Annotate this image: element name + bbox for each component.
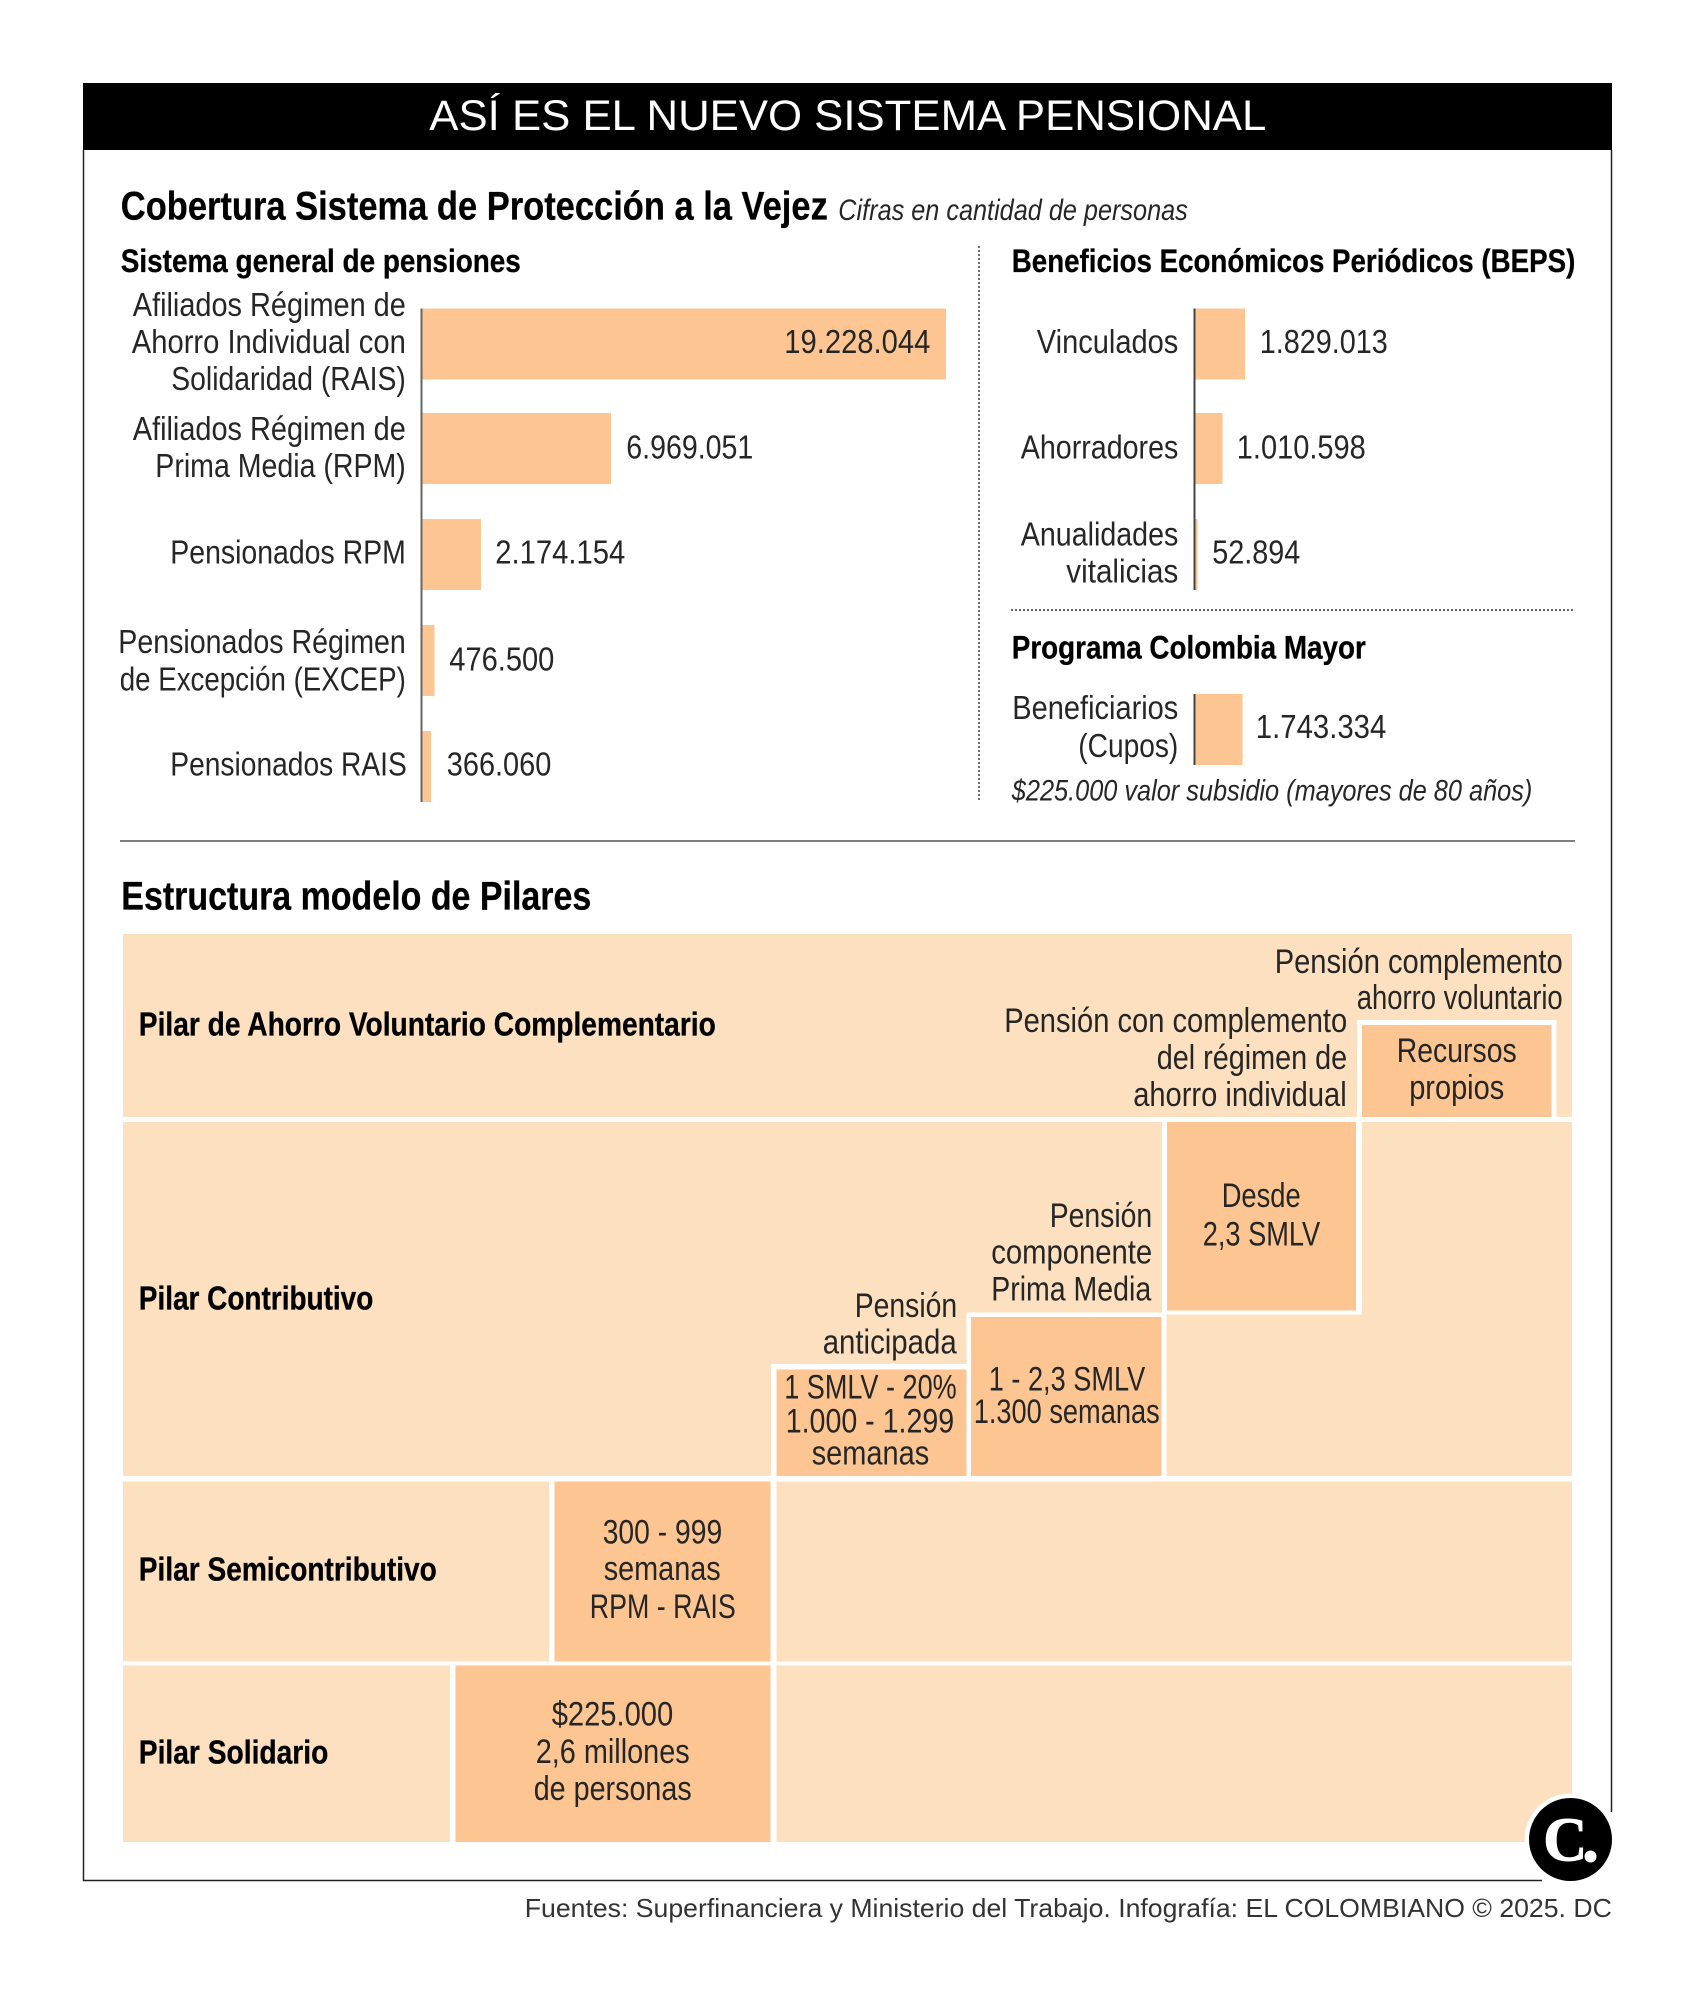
step: white outlines bbox=[450, 1020, 1556, 1842]
pilar: semicontributivo: Pilar Semicontributivo bbox=[139, 1550, 437, 1587]
pilar: contributivo: Prima Media bbox=[991, 1271, 1151, 1309]
pilar: ahorro voluntario: del régimen de bbox=[1157, 1039, 1347, 1077]
pilar: contributivo bbox=[139, 1122, 1356, 1476]
section divider bbox=[120, 840, 1575, 842]
note: valor subsidio: $225.000 valor subsidio (mayores de 80 años) bbox=[1011, 775, 1532, 808]
pilar: ahorro voluntario: ahorro individual bbox=[1133, 1076, 1347, 1114]
pilar: contributivo: 1.000 - 1.299 bbox=[786, 1403, 954, 1441]
vertical dotted divider bbox=[978, 246, 980, 802]
pilar: ahorro voluntario bbox=[139, 943, 1563, 1117]
pilar: solidario: $225.000 bbox=[552, 1696, 673, 1734]
bar chart: pensiones: Ahorro Individual con bbox=[132, 323, 406, 360]
bar chart: BEPS: Ahorradores bbox=[1021, 429, 1178, 466]
bar chart: pensiones: 6.969.051 bbox=[626, 429, 753, 466]
bar chart: pensiones: Afiliados Régimen de bbox=[133, 286, 406, 323]
panel: BEPS bbox=[1012, 243, 1575, 590]
pilar: semicontributivo: RPM - RAIS bbox=[590, 1588, 736, 1626]
pilar: contributivo: 1 - 2,3 SMLV bbox=[989, 1361, 1145, 1399]
bar chart: Colombia Mayor: (Cupos) bbox=[1078, 727, 1178, 764]
pilar: solidario: de personas bbox=[534, 1770, 692, 1808]
bar chart: pensiones: de Excepción (EXCEP) bbox=[120, 661, 406, 698]
bar chart: pensiones: 2.174.154 bbox=[495, 534, 625, 571]
horizontal dotted divider bbox=[1011, 609, 1575, 611]
pilar: semicontributivo: 300 - 999 bbox=[603, 1514, 722, 1552]
pilar: ahorro voluntario: ahorro voluntario bbox=[1357, 979, 1563, 1017]
pilar: contributivo: semanas bbox=[812, 1435, 929, 1473]
bar chart: BEPS: Anualidades bbox=[1021, 516, 1178, 553]
bar chart: pensiones: 366.060 bbox=[447, 746, 551, 783]
pilar: solidario bbox=[139, 1666, 771, 1842]
title banner: ASÍ ES EL NUEVO SISTEMA PENSIONAL bbox=[429, 92, 1266, 140]
pilar: ahorro voluntario: Pilar de Ahorro Voluntario Complementario bbox=[139, 1005, 716, 1042]
footer: sources: Fuentes: Superfinanciera y Ministerio del Trabajo. Infografía: EL COLOMBIANO © 2025. DC bbox=[525, 1893, 1612, 1923]
panel: sistema general de pensiones bbox=[118, 243, 946, 802]
bar chart: pensiones: Solidaridad (RAIS) bbox=[171, 360, 406, 397]
pilar: solidario: 2,6 millones bbox=[536, 1733, 690, 1771]
heading: cobertura: Cifras en cantidad de personas bbox=[838, 194, 1188, 227]
pilar: contributivo: Pensión bbox=[1050, 1197, 1152, 1235]
panel: pilares bbox=[123, 934, 1572, 1842]
heading: BEPS: Beneficios Económicos Periódicos (BEPS) bbox=[1012, 243, 1575, 279]
bar chart: BEPS: vitalicias bbox=[1066, 553, 1178, 590]
bar chart: pensiones: Pensionados RPM bbox=[170, 534, 406, 571]
pilar: contributivo: Pensión bbox=[855, 1287, 957, 1325]
bar chart: pensiones: 476.500 bbox=[449, 641, 554, 678]
bar chart: Colombia Mayor: Beneficiarios bbox=[1012, 689, 1178, 726]
heading: cobertura: Cobertura Sistema de Protección a la Vejez bbox=[121, 185, 828, 229]
pilar: ahorro voluntario: propios bbox=[1409, 1069, 1504, 1107]
icon: El Colombiano logo bbox=[1524, 1794, 1616, 1886]
pilar: contributivo: Desde bbox=[1222, 1177, 1301, 1215]
heading: sistema general: Sistema general de pensiones bbox=[121, 243, 521, 279]
bar chart: Colombia Mayor: 1.743.334 bbox=[1256, 708, 1386, 745]
icon: El Colombiano logo: C bbox=[1543, 1807, 1587, 1875]
bar chart: BEPS: Vinculados bbox=[1037, 323, 1178, 360]
bar chart: pensiones: 19.228.044 bbox=[784, 323, 930, 360]
pilar: ahorro voluntario: Pensión con complemento bbox=[1004, 1002, 1347, 1040]
bar chart: pensiones: Pensionados RAIS bbox=[170, 746, 407, 783]
pilar: solidario: Pilar Solidario bbox=[139, 1733, 328, 1770]
pilar: contributivo: Pilar Contributivo bbox=[139, 1279, 373, 1316]
pilar: contributivo: componente bbox=[991, 1234, 1152, 1272]
pilar: contributivo: 2,3 SMLV bbox=[1203, 1216, 1320, 1254]
bar chart: BEPS: 52.894 bbox=[1212, 534, 1300, 571]
title banner bbox=[83, 83, 1612, 150]
pilar: ahorro voluntario: Recursos bbox=[1397, 1032, 1517, 1070]
pilar: contributivo: 1 SMLV - 20% bbox=[784, 1369, 957, 1407]
pilar: ahorro voluntario: Pensión complemento bbox=[1275, 943, 1563, 981]
pilar: semicontributivo: semanas bbox=[604, 1550, 721, 1588]
pale background bbox=[123, 934, 1572, 1842]
pilar: semicontributivo bbox=[139, 1482, 771, 1662]
frame bbox=[84, 150, 1612, 1880]
bar chart: BEPS: 1.829.013 bbox=[1260, 323, 1388, 360]
bar chart: pensiones: Prima Media (RPM) bbox=[155, 447, 406, 484]
bar chart: BEPS bbox=[1021, 308, 1388, 590]
bar chart: Colombia Mayor bbox=[1012, 689, 1386, 765]
bar chart: BEPS: 1.010.598 bbox=[1237, 429, 1366, 466]
panel: programa Colombia Mayor bbox=[1011, 629, 1532, 808]
pilar: contributivo: anticipada bbox=[823, 1324, 957, 1362]
heading: Colombia Mayor: Programa Colombia Mayor bbox=[1012, 629, 1366, 665]
pilar: contributivo: 1.300 semanas bbox=[974, 1393, 1160, 1431]
bar chart: pensiones bbox=[118, 286, 946, 802]
bar chart: pensiones: Pensionados Régimen bbox=[118, 623, 406, 660]
bar chart: pensiones: Afiliados Régimen de bbox=[133, 410, 406, 447]
heading: estructura: Estructura modelo de Pilares bbox=[121, 875, 591, 919]
